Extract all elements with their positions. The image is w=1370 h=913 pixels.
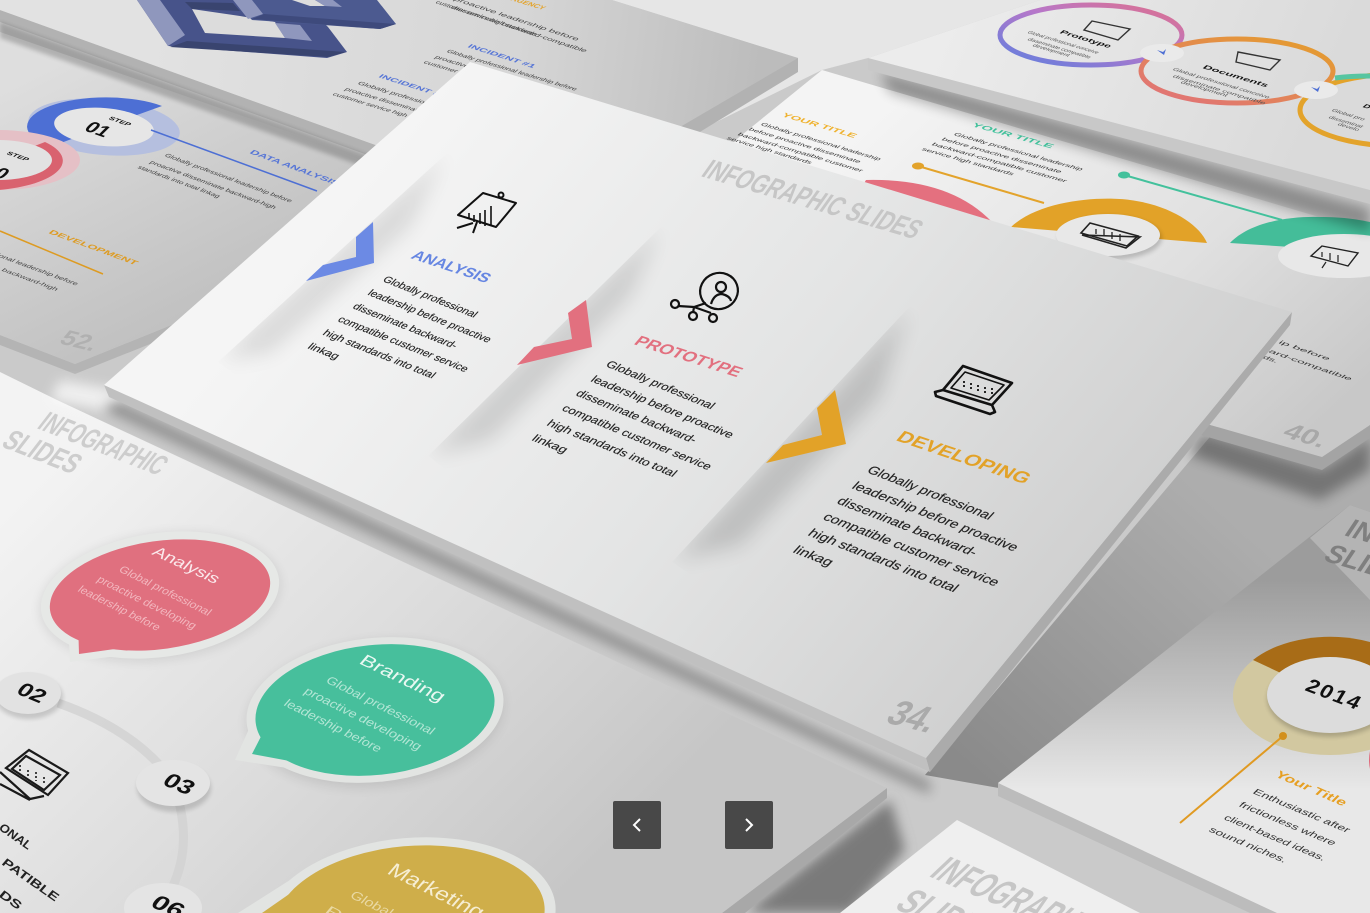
text: incident 2: Globally professional lead: [356, 80, 457, 114]
chevron: orange: [766, 390, 846, 463]
ring: third: develo: [1336, 122, 1361, 132]
panel: main slide 34: [104, 62, 1292, 772]
text: prototype body: disseminate backward-: [573, 387, 700, 445]
text: analysis body: compatible customer service: [335, 314, 472, 374]
text: your title green: before proactive disseminate: [940, 137, 1063, 174]
node: connector 2: [1294, 81, 1338, 99]
text: developing body: compatible customer service: [820, 511, 1002, 589]
text: partial body: PATIBLE: [0, 856, 62, 904]
text: developing body: Globally professional: [864, 464, 996, 523]
bubble: analysis: proactive developing: [94, 573, 200, 632]
shadow below main slide: [50, 380, 930, 794]
donut: step 02: STEP: [5, 150, 31, 162]
title: analysis: ANALYSIS: [408, 247, 495, 286]
title: prototype: PROTOTYPE: [631, 333, 747, 380]
node: laptop circle: [1056, 214, 1162, 260]
text: developing body: [790, 464, 1021, 595]
ring: documents: disseminate compatible: [1171, 74, 1268, 106]
text: prototype body: high standards into total: [544, 417, 680, 479]
text: your title yellow: backward-compatible customer: [736, 132, 865, 174]
icon: laptop: [0, 750, 68, 800]
text: prototype body: Globally professional: [603, 358, 718, 411]
text: incident top: customer service high standards: [434, 0, 540, 37]
text: your title green: Globally professional leadership: [952, 132, 1084, 172]
bubble: branding: [235, 625, 511, 799]
donut: step 01: STEP: [107, 115, 133, 127]
panel: middle-right slide 40: [600, 70, 1370, 470]
bubble: branding: proactive developing: [301, 685, 425, 753]
connector: green: [1118, 172, 1282, 220]
text: your title yellow: before proactive disseminate: [747, 127, 862, 164]
text: right fragment: ds.: [1261, 354, 1281, 364]
chevron: red: [517, 300, 592, 365]
donut: step 01: [26, 92, 182, 162]
dark shadow region right of main slide: [925, 330, 1370, 790]
heading: infographic slides: INFOGRAPHIC SLIDES: [696, 155, 929, 245]
column: developing: [766, 366, 1035, 595]
text: your title yellow: service high standards: [725, 136, 814, 165]
text: analysis body: Globally professional: [380, 274, 481, 320]
panel: left slide 52: [0, 22, 480, 374]
ring: documents: Global professional conceive: [1171, 67, 1272, 100]
text: prototype body: compatible customer service: [559, 402, 715, 472]
text: your title green: backward-compatible customer: [930, 142, 1069, 184]
text: developing body: disseminate backward-: [834, 495, 980, 559]
ring: prototype: Global professional conceive: [1026, 30, 1101, 55]
panel: upper-right slide: [868, 0, 1370, 204]
node: 03: 03: [158, 768, 201, 799]
text: development: [0, 229, 140, 292]
page number 40: 40.: [1277, 420, 1333, 453]
shadow below slide 40: [1190, 432, 1370, 500]
column: prototype: [517, 268, 747, 479]
shadow below upper-right slide: [880, 72, 1370, 232]
ring: prototype: Prototype: [1058, 29, 1115, 49]
text: right fragment: [1261, 339, 1355, 382]
chart: green arc: [1230, 217, 1370, 252]
node: 03: [136, 760, 211, 812]
ring: prototype: [1000, 5, 1182, 65]
page number 52: 52.: [54, 326, 104, 356]
ring: third: [1300, 74, 1370, 146]
ring: documents: Documents: [1201, 64, 1272, 88]
text: partial body: [0, 821, 62, 912]
text: incident 1: Globally professional leadership before: [445, 48, 580, 92]
donut: 2014: 2014: [1301, 676, 1367, 715]
icon: laptop: [935, 366, 1012, 414]
panel: bottom-left slide: [0, 372, 887, 913]
title: developing: DEVELOPING: [892, 428, 1035, 488]
text: your title green: [920, 122, 1084, 184]
bubble: branding: leadership before: [281, 697, 385, 755]
text: developing body: linkag: [790, 544, 836, 569]
bubble: analysis: Analysis: [149, 543, 225, 587]
text: your title: Enthusiastic after: [1250, 787, 1353, 835]
bubble: branding: Global professional: [323, 674, 438, 737]
light background at top: [612, 0, 1040, 130]
chart: orange arc: [1011, 199, 1207, 243]
text: analysis body: linkag: [305, 341, 343, 362]
connector: orange: [912, 162, 1044, 203]
chevron: blue: [306, 222, 374, 281]
text: prototype body: leadership before proactive: [588, 373, 737, 440]
text: incident top: [434, 0, 590, 54]
ring: third: disseminat: [1327, 115, 1365, 129]
connector: 2014: [1180, 732, 1287, 823]
text: development: DEVELOPMENT: [47, 229, 140, 266]
donut: step 01: 01: [80, 118, 116, 141]
text: your title: client-based ideas.: [1221, 813, 1329, 863]
line: data analysis: [151, 130, 317, 191]
ring: prototype: disseminate compatible: [1026, 37, 1093, 60]
node: 06: [124, 883, 202, 913]
text: prototype body: [529, 358, 737, 479]
panel: top-left slide: [0, 0, 798, 206]
node: connector 1: [1140, 44, 1184, 62]
slab edges: [926, 312, 1292, 772]
shadow below top-left slide: [0, 22, 373, 170]
text: data analysis: proactive disseminate backward-high: [148, 159, 278, 210]
text: your title: Your Title: [1272, 769, 1351, 808]
bubble: branding: Branding: [355, 651, 450, 706]
bubble: analysis: Global professional: [116, 563, 214, 618]
text: your title yellow: YOUR TITLE: [780, 112, 859, 139]
ring: documents: development: [1179, 80, 1230, 98]
text: incident 1: customer serv: [422, 59, 478, 79]
panel: bottom-center slide: [840, 820, 1140, 913]
dark shadow patch below bottom-left slide: [745, 800, 905, 913]
node: 02: 02: [12, 679, 52, 707]
heading: infographic slides: [1319, 514, 1370, 588]
text: data analysis: DATA ANALYSIS: [248, 149, 342, 187]
donut: 2014: [1233, 637, 1370, 755]
text: analysis body: leadership before proactive: [365, 287, 495, 345]
button: next: [725, 801, 773, 849]
text: incident 1: INCIDENT #1: [466, 43, 539, 69]
page number 34: 34.: [879, 693, 948, 740]
button: previous: [613, 801, 661, 849]
text: incident 2: proactive disseminate back: [343, 86, 444, 120]
text: incident 1: proactive diss: [433, 54, 489, 74]
text: developing body: high standards into total: [805, 527, 961, 595]
text: analysis body: disseminate backward-: [350, 301, 461, 351]
text: your title: sound niches.: [1206, 825, 1290, 865]
text: analysis body: high standards into total: [320, 327, 439, 380]
text: your title green: YOUR TITLE: [970, 122, 1056, 149]
ring: documents: [1141, 39, 1333, 106]
text: analysis body: [305, 274, 495, 380]
node: easel circle: [1278, 234, 1370, 278]
heading: infographic slides: INFOGRAPHIC: [32, 407, 174, 481]
text: data analysis: Globally professional leadership before: [163, 152, 294, 204]
bubble: analysis: leadership before: [75, 583, 164, 633]
text: incident 2: INCIDENT #1: [377, 73, 450, 99]
donut: step 02: [0, 130, 80, 190]
icon: person network: [671, 268, 743, 322]
icon: blue 3D frames: [137, 0, 396, 58]
node: 02: [0, 672, 63, 719]
ring: third: Global pro: [1330, 108, 1367, 122]
text: prototype body: linkag: [529, 432, 571, 456]
text: incident 2: customer service high stan: [331, 91, 427, 123]
marker: pink edge: [1369, 734, 1370, 786]
text: your title green: service high standards: [920, 147, 1016, 177]
text: data analysis: [136, 149, 342, 210]
text: incident 2: [331, 73, 457, 123]
text: incident 1: [422, 43, 580, 92]
bubble: analysis: [33, 517, 287, 675]
text: your title yellow: [725, 112, 882, 174]
text: right fragment: ard-compatible: [1267, 348, 1355, 382]
bubble: marketing: [238, 826, 562, 913]
text: your title: frictionless where: [1236, 800, 1339, 848]
column: analysis: [305, 192, 516, 380]
text: your title: [1206, 769, 1353, 865]
ring: prototype: development: [1031, 43, 1071, 58]
icon: easel: [457, 192, 516, 233]
heading: infographic slides: [886, 850, 1115, 913]
chart: red dome: [860, 180, 992, 260]
text: your title yellow: Globally professional leadership: [759, 122, 882, 162]
fold shadows: [232, 172, 434, 360]
timeline arc: [58, 703, 184, 888]
text: right fragment: ip before: [1277, 339, 1333, 362]
text: data analysis: standards into total linkag: [136, 164, 222, 199]
text: incident top: disseminate backward-compatible: [449, 4, 590, 54]
panel: bottom-right slide: [998, 505, 1370, 913]
text: developing body: leadership before proactive: [849, 480, 1021, 554]
heading: infographic slides: [0, 407, 174, 481]
